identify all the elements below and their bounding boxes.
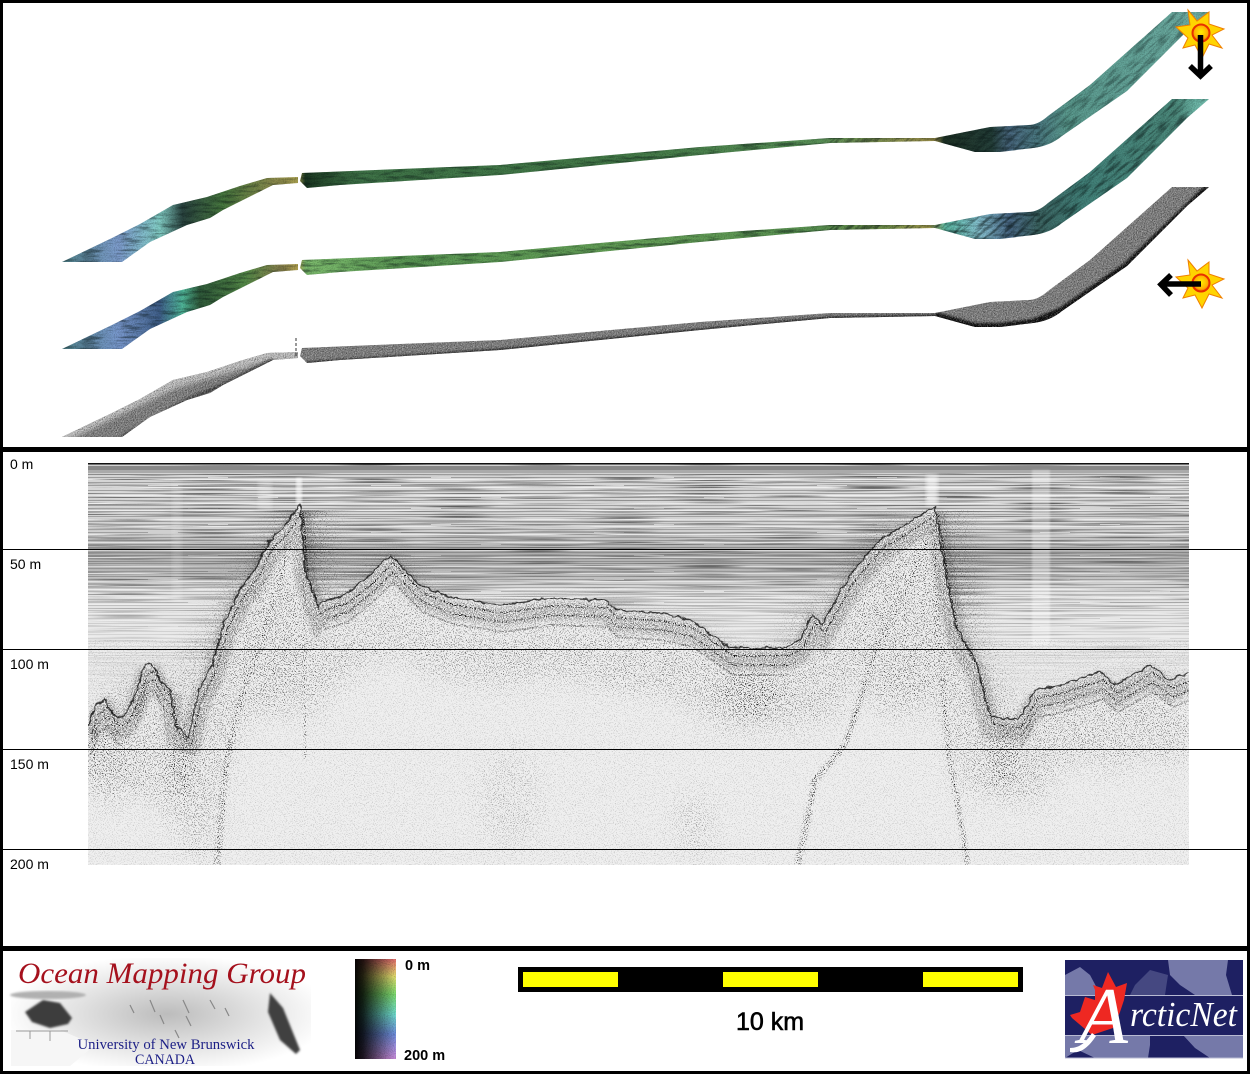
icon: sun with south-pointing arrow [1176,10,1224,76]
logo: band [1065,996,1243,1035]
scale bar [518,967,1023,1036]
scale label: 10 km [736,1008,804,1036]
sonar background [88,463,1189,865]
depth axis labels: 100 m [10,656,49,672]
chart: sub-bottom sonar profile [81,463,1192,865]
legend label top: 0 m [405,958,430,974]
icon: maple leaf [1070,972,1127,1035]
colour ramp [355,959,396,1059]
logo: wordmark: rcticNet [1130,995,1238,1034]
swath: grey backscatter [55,180,1215,445]
swath: colour relief lit from north [62,12,1208,262]
depth grid lines [3,550,1247,850]
depth colour legend [355,958,445,1064]
seabed reflector bands [89,512,1192,754]
panel: sun-illuminated swath strips [62,12,1209,437]
legend label bottom: 200 m [404,1048,445,1064]
sub-bottom far-field speckle [81,510,1189,865]
depth axis labels: 50 m [10,556,41,572]
depth axis labels: 0 m [10,456,33,472]
logo: A swash [1070,1033,1096,1052]
swath: colour relief lit from east [62,99,1209,349]
logo: title: Ocean Mapping Group [18,957,306,990]
logo: wordmark initial: A [1074,973,1129,1061]
logo: map land shapes [1065,960,1243,1058]
seabed reflector [88,504,1189,738]
water column banding [88,464,1189,708]
logo: country: CANADA [135,1052,195,1068]
logo: Ocean Mapping Group [10,957,311,1068]
depth axis labels: 150 m [10,756,49,772]
logo: university: University of New Brunswick [78,1037,255,1053]
depth axis labels: 200 m [10,856,49,872]
logo: ArcticNet [1065,960,1243,1061]
logo: scan fragments [10,991,300,1066]
logo: band rules [1065,996,1243,1058]
icon: sun with west-pointing arrow [1161,260,1224,308]
depth axis labels [10,456,49,872]
surface line [88,463,1189,464]
